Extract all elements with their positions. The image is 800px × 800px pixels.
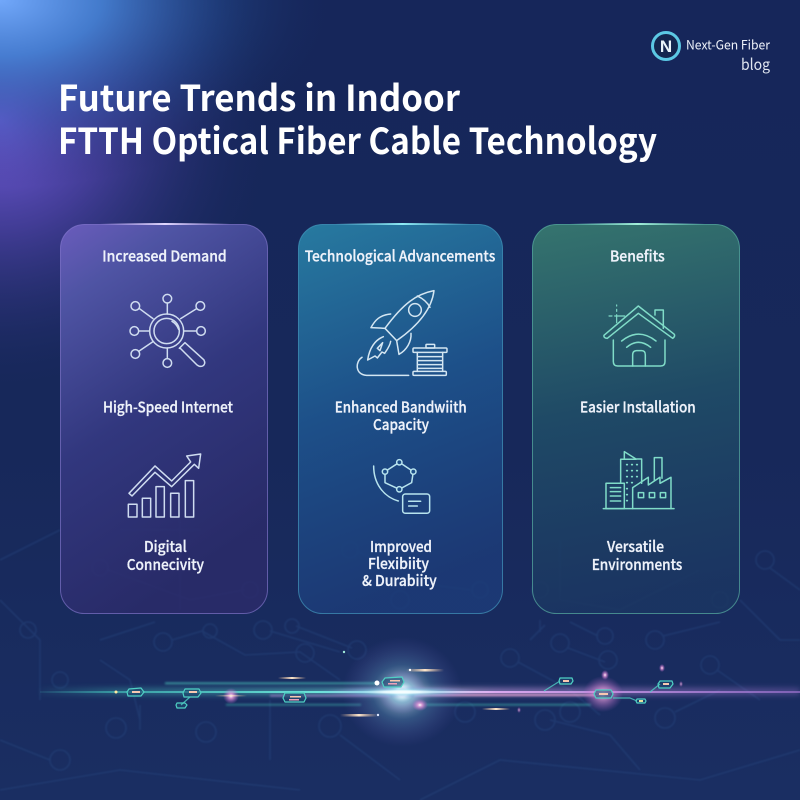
label: Digital Connecivity: Digital xyxy=(144,536,187,557)
label: Versatile Environments: Environments xyxy=(592,554,682,575)
icon: N badge: N xyxy=(660,37,672,56)
light streaks xyxy=(114,651,510,716)
icon: growth chart xyxy=(128,454,201,517)
label: Digital Connecivity: Connecivity xyxy=(127,554,204,575)
icon: smart home wifi xyxy=(604,305,675,366)
icon: hexagon network with card xyxy=(374,460,430,513)
logo: Next-Gen Fiber blog: Next-Gen Fiber xyxy=(686,34,771,54)
label: Versatile Environments: Versatile xyxy=(606,536,664,557)
heading: Benefits: Benefits xyxy=(610,246,665,266)
fiber light beam with chips xyxy=(40,637,800,747)
heading: Technological Advancements: Technological Advancements xyxy=(305,246,495,266)
icon: city and factory xyxy=(603,452,674,509)
panel: Technological Advancements xyxy=(298,223,502,614)
label: Digital Connecivity xyxy=(127,536,204,575)
label: Enhanced Bandwiith Capacity xyxy=(335,396,467,435)
label: Easier Installation: Easier Installation xyxy=(580,396,696,418)
chip highlights xyxy=(132,680,669,702)
title: FTTH Optical Fiber Cable Technology xyxy=(58,113,657,165)
main beam xyxy=(40,682,800,706)
label: Improved Flexibiity & Durabiity: & Durabiity xyxy=(362,570,437,591)
logo: Next-Gen Fiber blog xyxy=(652,32,771,75)
title xyxy=(58,70,657,165)
icon: network magnifier xyxy=(130,294,205,367)
label: Versatile Environments xyxy=(592,536,682,575)
label: Improved Flexibiity & Durabiity xyxy=(362,536,437,591)
icon: rocket and cable spool xyxy=(357,291,447,375)
label: Enhanced Bandwiith Capacity: Capacity xyxy=(373,414,429,435)
heading: Increased Demand: Increased Demand xyxy=(102,246,227,266)
label: High-Speed Internet: High-Speed Internet xyxy=(103,396,233,418)
panel: Benefits xyxy=(532,223,740,614)
label: Enhanced Bandwiith Capacity: Enhanced Bandwiith xyxy=(335,396,467,418)
chips xyxy=(127,677,673,708)
logo: Next-Gen Fiber blog: blog xyxy=(741,53,770,75)
title: Future Trends in Indoor xyxy=(58,70,460,122)
circuit board pattern xyxy=(0,520,800,800)
central flare xyxy=(223,637,683,747)
label: Improved Flexibiity & Durabiity: Flexibiity xyxy=(368,553,429,574)
panel: Increased Demand xyxy=(60,223,268,614)
label: Improved Flexibiity & Durabiity: Improved xyxy=(370,536,432,557)
